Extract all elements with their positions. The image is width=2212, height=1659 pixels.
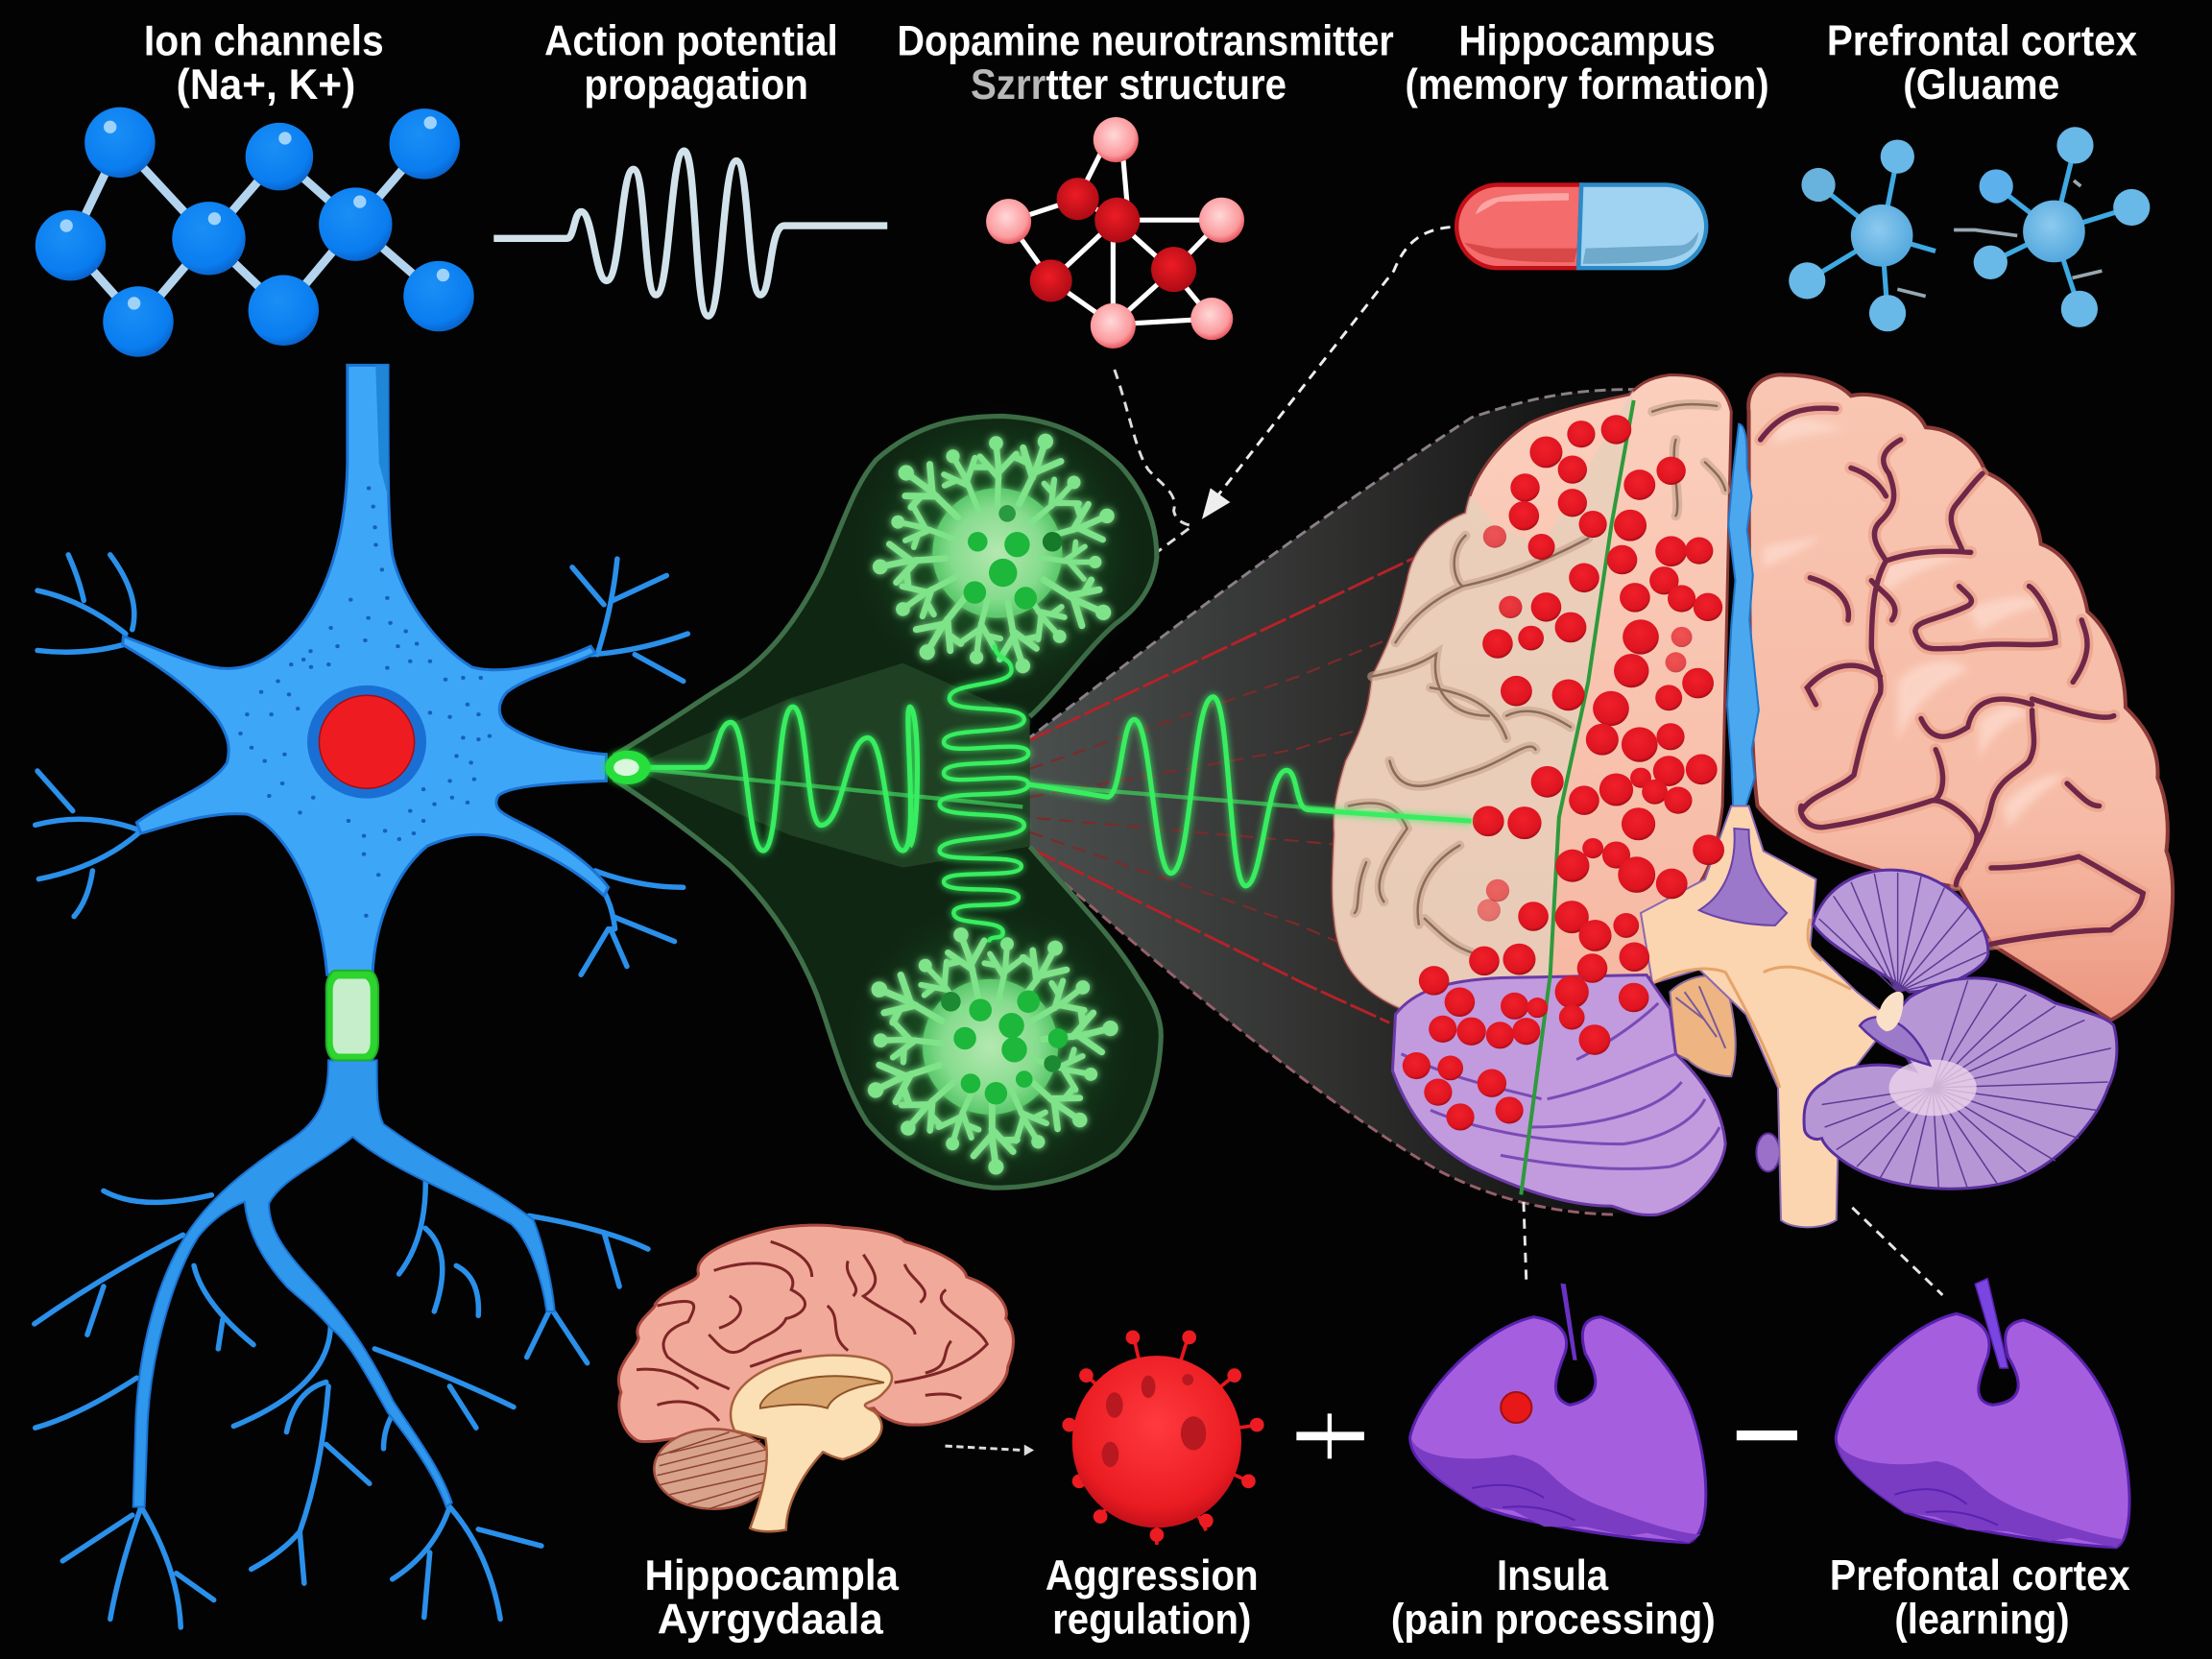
heading: ion channels (144, 17, 384, 108)
arrow: pill to synapse (1202, 228, 1451, 519)
icon: action potential wave (493, 151, 887, 316)
icon: dopamine molecule (986, 117, 1244, 349)
brain coronal illustration (1325, 374, 2173, 1227)
icon: capsule pill (1456, 184, 1706, 268)
ventricle (1699, 829, 1787, 926)
heading: ion channels: Ion channels (144, 17, 384, 64)
brainstem inner arches (1652, 919, 1851, 1088)
neuron nucleus (307, 685, 426, 799)
icon: sagittal brain (618, 1225, 1014, 1531)
label: aggression regulation: Aggression (1046, 1552, 1259, 1599)
label: aggression regulation (1046, 1552, 1259, 1644)
panel: synapse bulb (615, 405, 1161, 1195)
heading: hippocampus: (memory formation) (1406, 61, 1769, 108)
heading: hippocampus: Hippocampus (1458, 17, 1716, 64)
chart: right action potential wave (1028, 697, 1472, 886)
icon: axon terminal knob (605, 751, 650, 784)
sagittal cerebellum (654, 1429, 774, 1509)
chart: left action potential wave (628, 707, 917, 851)
heading: dopamine (898, 17, 1394, 108)
heading: hippocampus (1406, 17, 1769, 108)
arrow: brain to virus (945, 1445, 1034, 1455)
neuron granules (240, 489, 490, 916)
heading: prefrontal cortex: Prefrontal cortex (1827, 17, 2138, 64)
label: insula: Insula (1497, 1552, 1609, 1599)
stem side folds (1670, 976, 1857, 1171)
neuron axon stub highlight (375, 365, 388, 496)
right hemisphere sulci (1761, 408, 2143, 944)
label: hippocampla amygdala: Ayrgydaala (658, 1597, 883, 1644)
longitudinal fissure (1727, 424, 1759, 805)
label: hippocampla amygdala: Hippocampla (645, 1552, 899, 1599)
left hemisphere (1325, 375, 1731, 1031)
sagittal stem and corpus (731, 1356, 892, 1531)
panel: magnification fan (1025, 390, 1636, 1214)
right hemisphere highlights (1764, 418, 2067, 829)
arrow: dopamine to synapse (1115, 370, 1192, 578)
label: insula (1391, 1552, 1716, 1644)
label: prefrontal learning: Prefontal cortex (1830, 1552, 2130, 1599)
sagittal inner fold (760, 1376, 884, 1408)
red receptor markers (1403, 415, 1724, 1131)
label: prefrontal learning (1830, 1552, 2130, 1644)
icon: plus sign (1296, 1413, 1364, 1458)
heading: action potential: propagation (584, 61, 808, 108)
icon: top synaptic vesicle (874, 428, 1118, 674)
heading: prefrontal cortex (1827, 17, 2138, 108)
icon: glutamate molecules (1789, 127, 2150, 331)
label: hippocampla amygdala (645, 1552, 899, 1644)
heading: dopamine: Szrrtter structure (971, 61, 1286, 108)
icon: insula organ (1410, 1284, 1706, 1543)
left hemisphere sulci (1349, 404, 1725, 952)
green signal trace across brain (1521, 400, 1634, 1194)
brainstem (1641, 805, 1892, 1227)
heading: action potential (544, 17, 838, 108)
callout lines to insula and prefrontal (1524, 1202, 1942, 1295)
sagittal gyri (637, 1241, 987, 1421)
heading: ion channels: (Na+, K+) (177, 61, 355, 108)
label: prefrontal learning: (learning) (1894, 1597, 2070, 1644)
brain stem junction (1860, 1017, 1930, 1065)
right upper cerebellar fan (1813, 870, 1988, 992)
heading: action potential: Action potential (544, 17, 838, 64)
icon: minus sign (1737, 1431, 1797, 1440)
heading: dopamine: Dopamine neurotransmitter (898, 17, 1394, 64)
icon: prefrontal organ (1836, 1279, 2129, 1548)
right lower cerebellar fan (1804, 978, 2117, 1190)
chart: straight signal axis (628, 767, 1472, 821)
neuron myelin node (326, 971, 378, 1060)
left cerebellum (1392, 975, 1725, 1215)
neuron lower axon branches (133, 1060, 555, 1506)
heading: prefrontal cortex: (Gluame (1903, 61, 2059, 108)
right hemisphere fold shading (1761, 408, 2143, 944)
sagittal cerebrum (618, 1225, 1014, 1442)
stem central highlight (1876, 992, 1904, 1031)
neuron (35, 365, 687, 1627)
left hemisphere fold shading (1349, 404, 1725, 952)
neuron soma (123, 365, 609, 974)
neuron dendrites (35, 555, 687, 1627)
label: aggression regulation: regulation) (1052, 1597, 1251, 1644)
label: insula: (pain processing) (1391, 1597, 1716, 1644)
icon: blue ion channel molecule (36, 108, 474, 357)
right hemisphere (1748, 374, 2173, 1021)
chart: vertical action potential wave (940, 645, 1028, 943)
icon: bottom synaptic vesicle (840, 904, 1136, 1193)
icon: red pathogen (1062, 1331, 1264, 1545)
